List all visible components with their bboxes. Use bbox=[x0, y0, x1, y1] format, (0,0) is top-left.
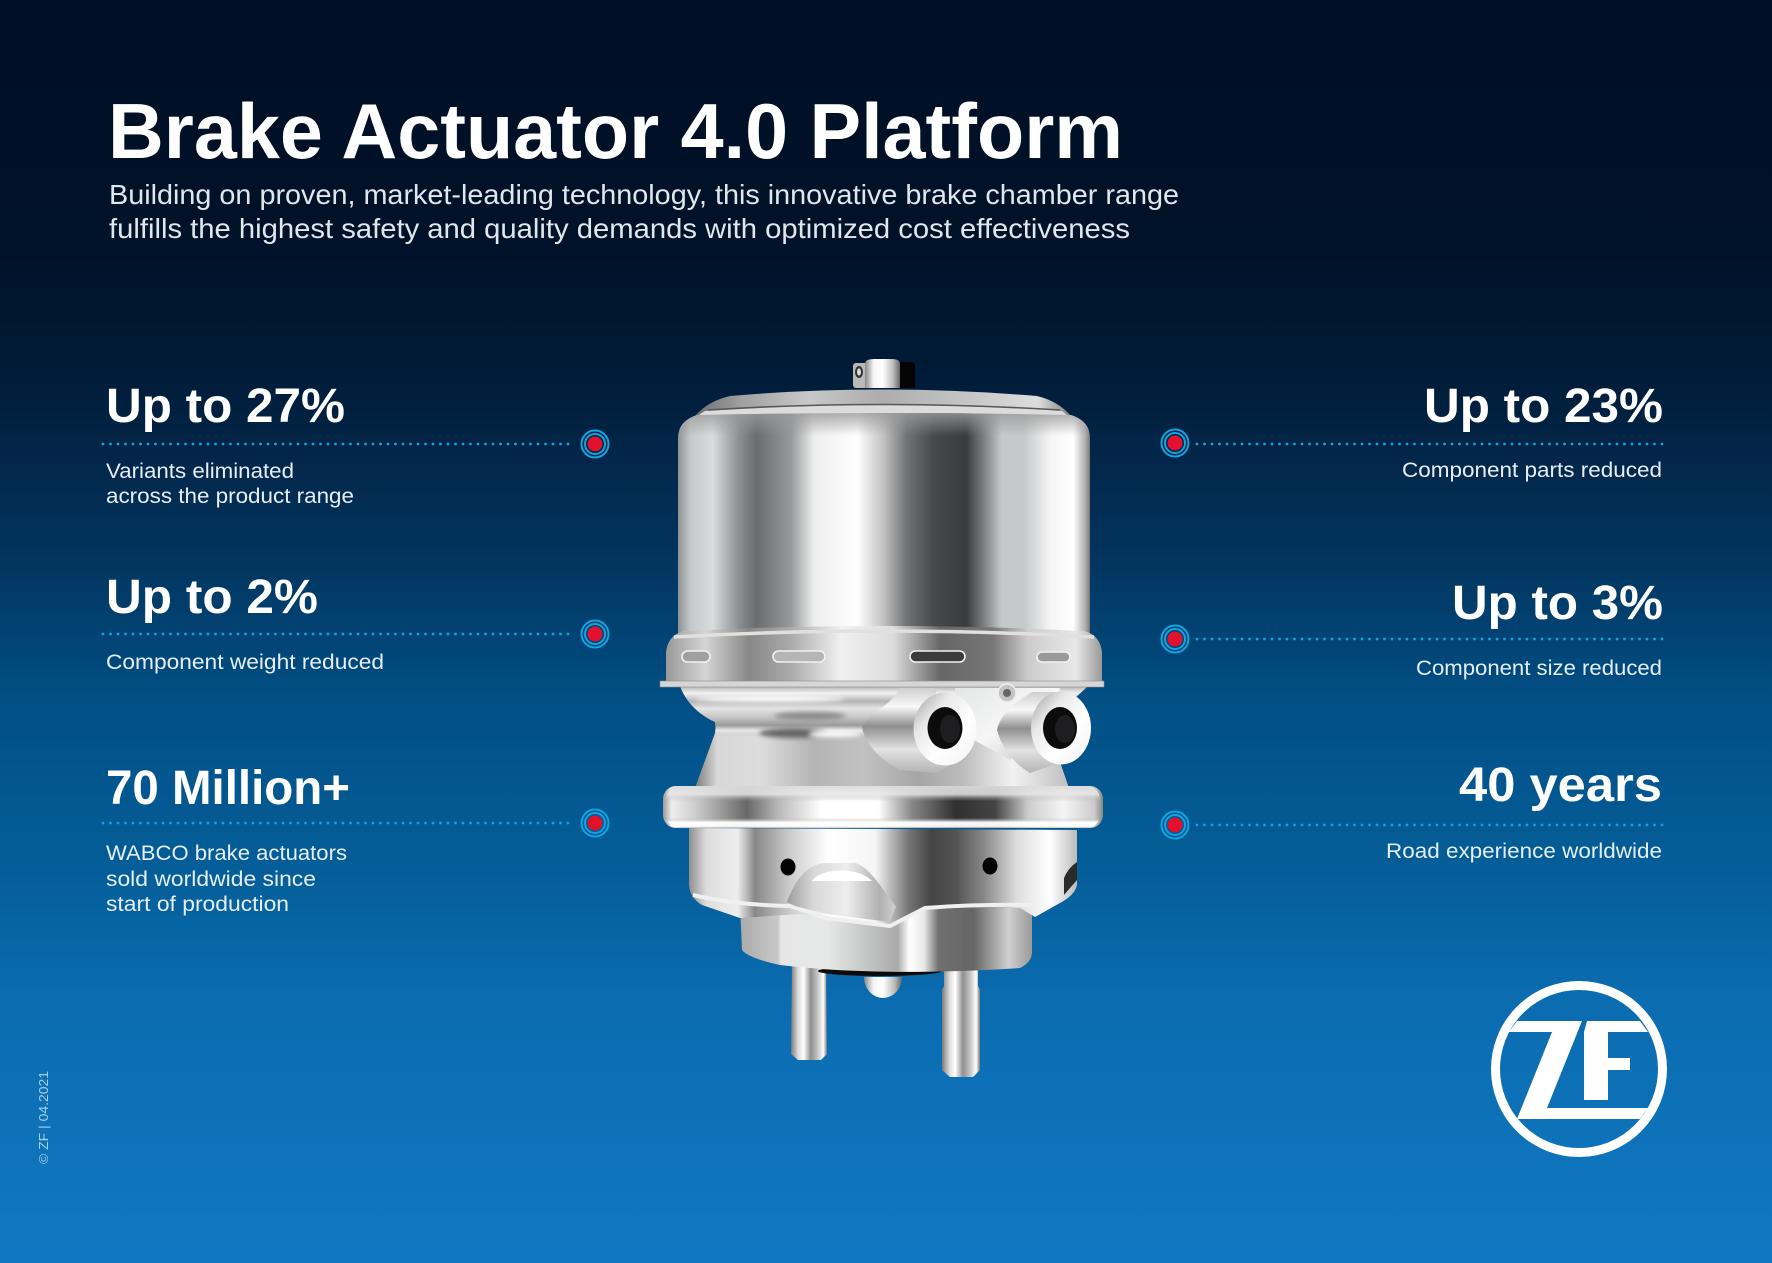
neck bbox=[680, 686, 1088, 788]
ZF logo bbox=[1496, 986, 1662, 1152]
subtitle: fulfills the highest safety and quality demands with optimized cost effectiveness bbox=[109, 213, 1130, 244]
glass area between ports bbox=[955, 688, 1060, 760]
left port body bbox=[862, 688, 950, 773]
stat: 40 years bbox=[1197, 759, 1667, 863]
bump highlight bbox=[812, 870, 872, 881]
stat: 70 million+: start of production bbox=[106, 893, 289, 916]
stat: 40 years: 40 years bbox=[1459, 759, 1662, 812]
bolt bbox=[998, 684, 1016, 702]
cylinder housing bbox=[678, 413, 1090, 645]
cap rim bbox=[697, 405, 1068, 416]
flange bbox=[660, 681, 1104, 687]
stat: up to 27%: Up to 27% bbox=[106, 380, 345, 433]
band highlight bbox=[674, 631, 1094, 637]
brake actuator product illustration bbox=[660, 359, 1104, 1077]
stat: up to 3%: Up to 3% bbox=[1452, 577, 1663, 630]
body lip bbox=[693, 895, 1033, 926]
subtitle bbox=[109, 179, 1179, 244]
body side notch bbox=[1064, 862, 1077, 895]
stat: up to 27%: Variants eliminated bbox=[106, 460, 294, 483]
mounting band bbox=[666, 626, 1102, 681]
marker: up to 23% bbox=[1162, 430, 1188, 456]
stat: up to 2%: Up to 2% bbox=[106, 571, 318, 624]
stud on top bbox=[853, 359, 915, 388]
pins and ball underneath bbox=[791, 965, 980, 1077]
stat: up to 27%: across the product range bbox=[106, 485, 354, 508]
stat: up to 23%: Component parts reduced bbox=[1402, 459, 1662, 482]
stat: up to 2% bbox=[103, 571, 575, 674]
stat: up to 23%: Up to 23% bbox=[1424, 380, 1663, 433]
stat: up to 23% bbox=[1197, 380, 1667, 482]
marker: 70 million+ bbox=[582, 810, 608, 836]
right port body bbox=[997, 692, 1060, 773]
cap rim line bbox=[708, 404, 1060, 410]
stat: 40 years: Road experience worldwide bbox=[1386, 840, 1662, 863]
top cap bbox=[695, 390, 1071, 416]
right air port bbox=[1031, 692, 1091, 764]
stat: up to 27% bbox=[103, 380, 575, 508]
stat: 70 million+: WABCO brake actuators bbox=[106, 842, 347, 865]
left air port bbox=[914, 692, 976, 766]
stat: 70 million+: sold worldwide since bbox=[106, 868, 316, 891]
neck reflections bbox=[695, 696, 861, 738]
lower base bbox=[740, 905, 1032, 972]
marker: up to 3% bbox=[1162, 626, 1188, 652]
band slots bbox=[682, 651, 1070, 662]
stat: up to 2%: Component weight reduced bbox=[106, 651, 384, 674]
neck upper bands bbox=[680, 686, 1088, 736]
vent holes bbox=[780, 858, 998, 876]
copyright note: © ZF | 04.2021 bbox=[37, 1071, 51, 1164]
stat: up to 3%: Component size reduced bbox=[1416, 657, 1662, 680]
lower body bbox=[689, 828, 1077, 928]
stamped bump bbox=[787, 863, 896, 922]
stat: up to 3% bbox=[1197, 577, 1667, 680]
clamp ring rim bbox=[666, 786, 1100, 828]
marker: up to 27% bbox=[582, 430, 608, 458]
stat: 70 million+ bbox=[103, 762, 575, 916]
cylinder top shading bbox=[678, 413, 1090, 438]
stat: 70 million+: 70 Million+ bbox=[106, 762, 350, 815]
title: Brake Actuator 4.0 Platform bbox=[108, 87, 1123, 175]
marker: 40 years bbox=[1162, 812, 1188, 838]
subtitle: Building on proven, market-leading technology, this innovative brake chamber range bbox=[109, 179, 1179, 210]
clamp ring bbox=[663, 786, 1103, 828]
marker: up to 2% bbox=[582, 620, 608, 648]
